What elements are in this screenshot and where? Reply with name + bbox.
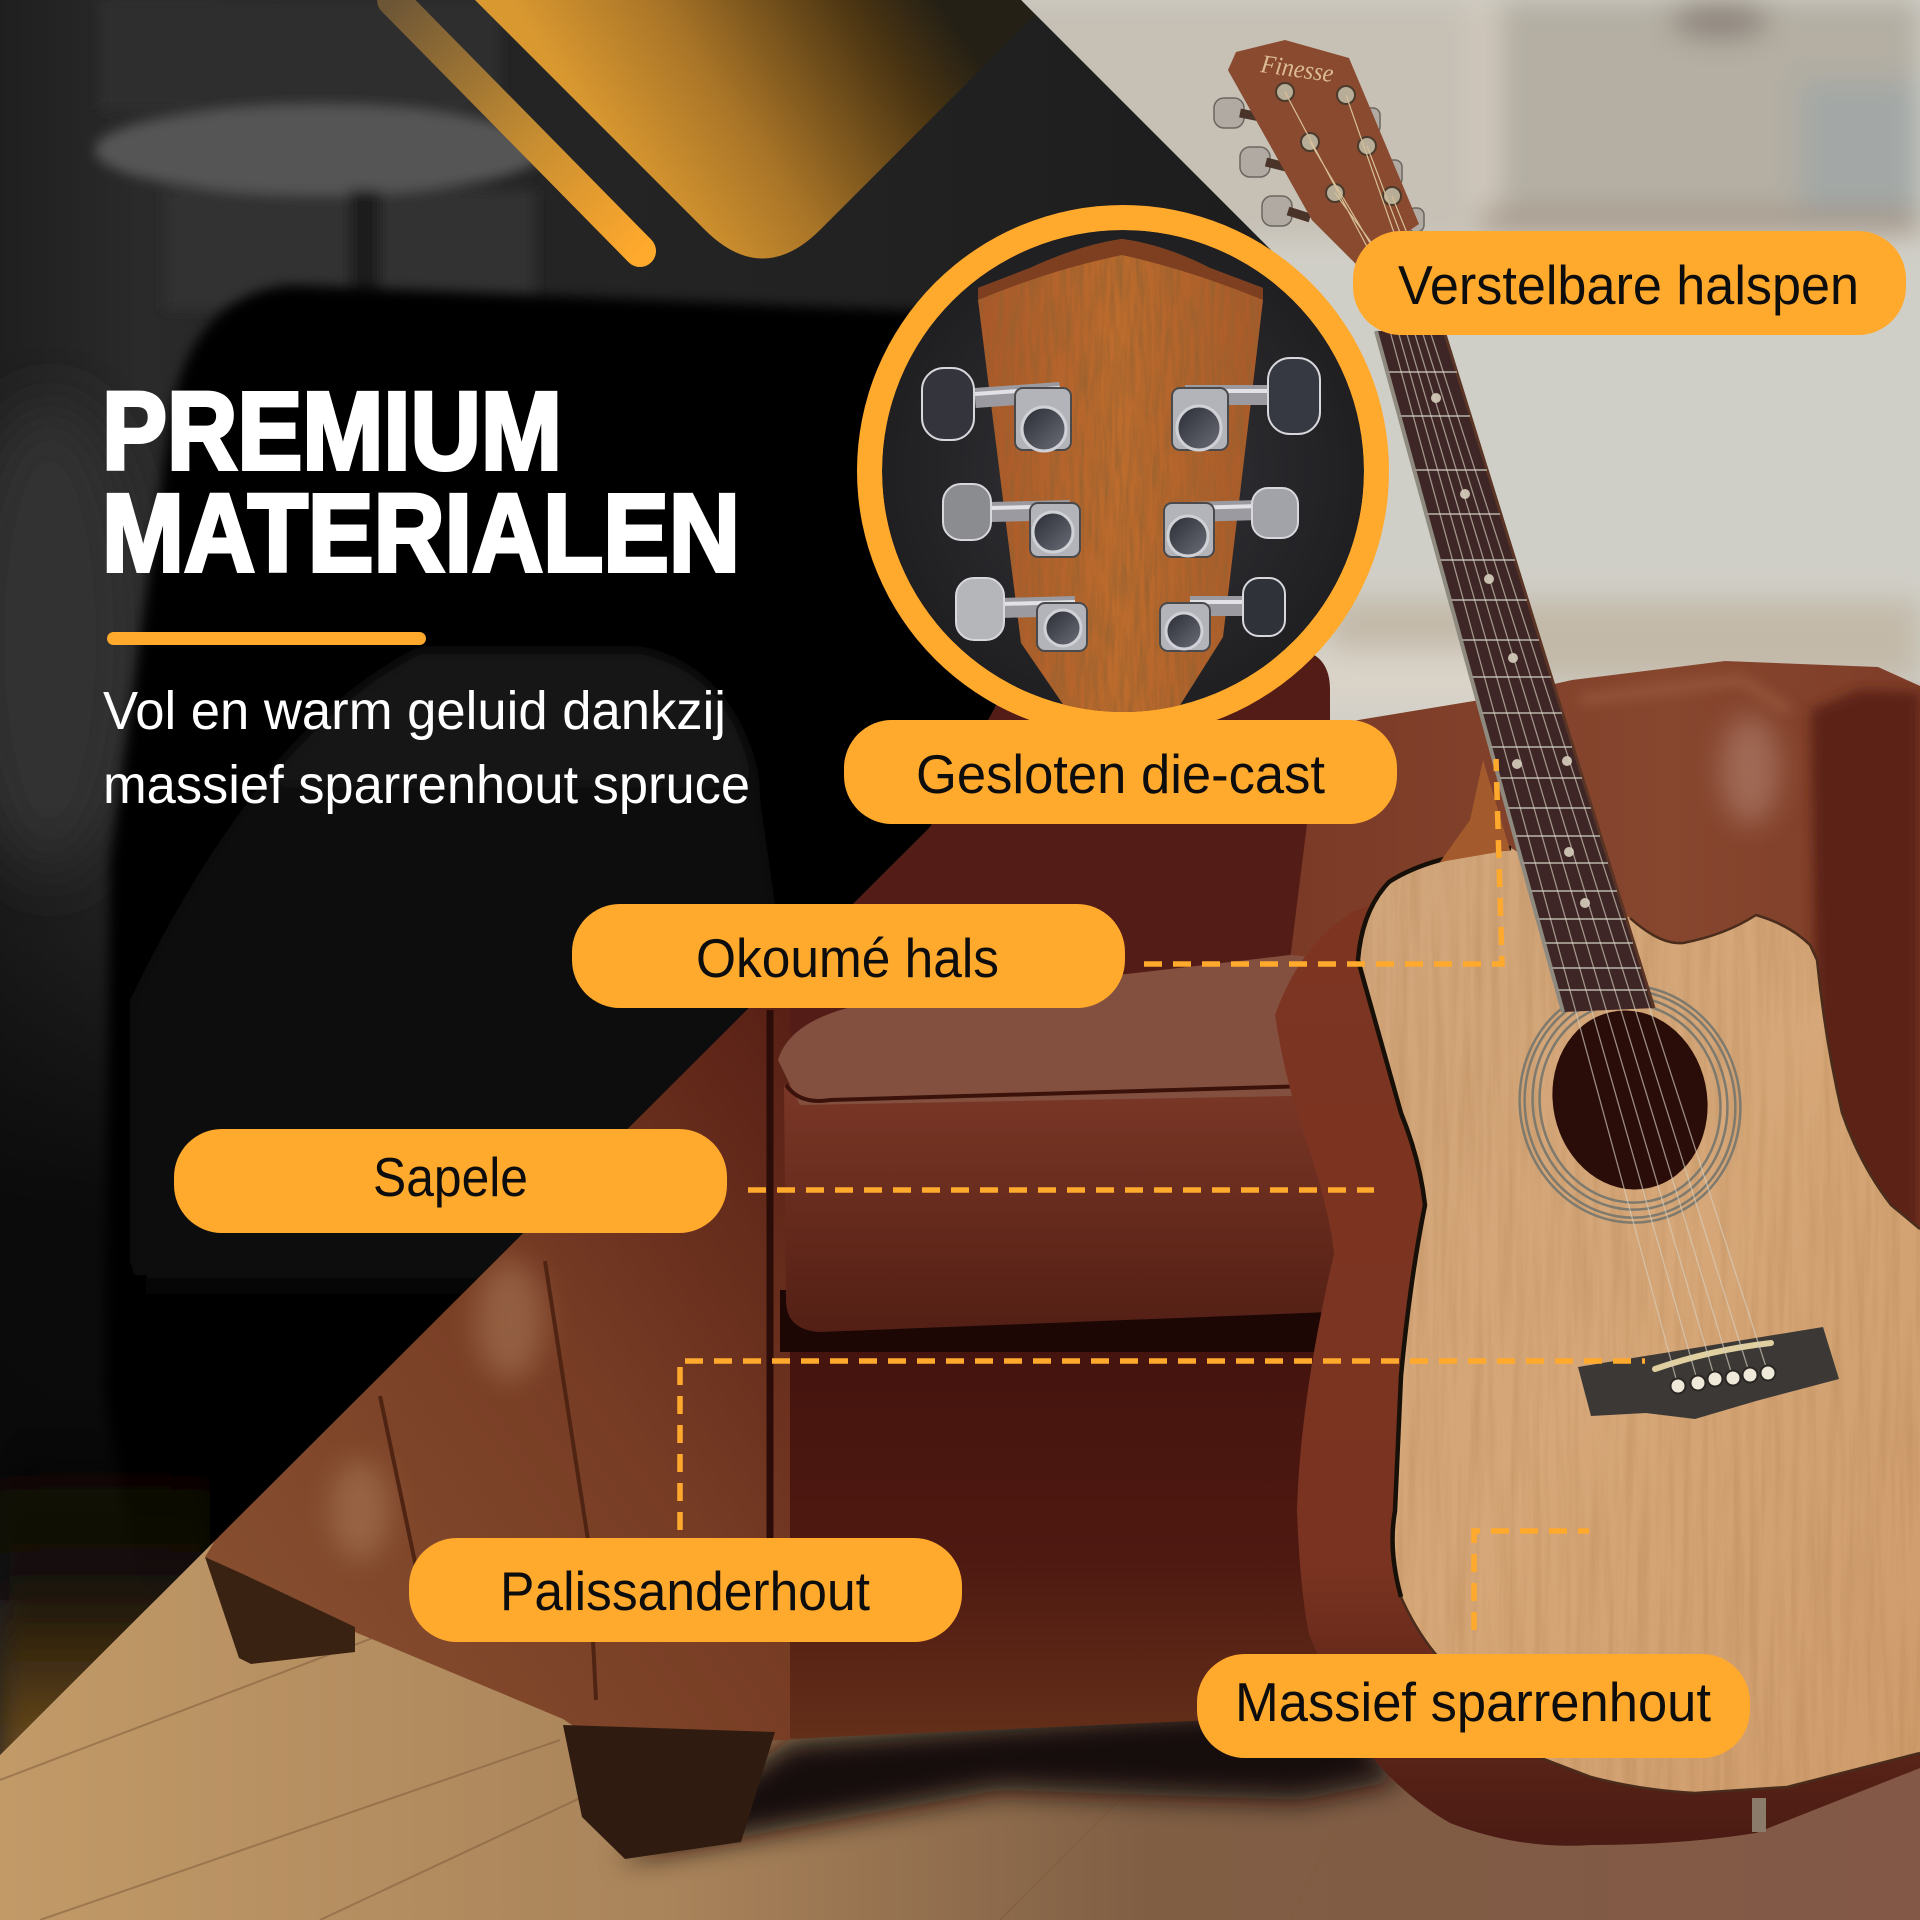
subtitle (103, 681, 750, 815)
lit wall patch left (0, 409, 114, 864)
label: Massief sparrenhout: Massief sparrenhout (1235, 1671, 1711, 1733)
frets (1387, 372, 1647, 990)
chair front lower panel (770, 1290, 1350, 1739)
top decoration: gold rounded diamond (475, 0, 1035, 258)
dark panel with grayscale armchair (0, 0, 1272, 1755)
fretboard (1376, 331, 1654, 1012)
orange ring (857, 205, 1389, 737)
seat cushion top (778, 955, 1345, 1105)
chair back behind cushion (760, 650, 1330, 1050)
label: Okoumé hals (572, 904, 1125, 1008)
front seam (766, 1010, 774, 1540)
tuner shafts (1240, 113, 1310, 218)
right arm of the chair (1290, 661, 1920, 1300)
headstock rear wood (978, 239, 1263, 730)
dashed connector lines (680, 759, 1645, 1630)
divider rule (107, 632, 426, 645)
guitar top outline (1358, 848, 1511, 1597)
tuner posts (1276, 83, 1401, 205)
label: Palissanderhout: Palissanderhout (500, 1560, 870, 1622)
subtitle line 2: massief sparrenhout spruce (103, 755, 750, 815)
tuner: housings (1015, 388, 1228, 651)
black armchair (106, 280, 996, 1612)
lower arm of the black chair (130, 650, 790, 1500)
heading: PREMIUM MATERIALEN (102, 370, 740, 595)
dark gap under cushion (780, 1290, 1350, 1352)
headstock top edge (978, 239, 1263, 300)
cushion piping (786, 1085, 1345, 1101)
label: Palissanderhout (409, 1538, 962, 1642)
inset circle: headstock back detail (857, 205, 1389, 737)
label: Sapele: Sapele (373, 1146, 528, 1208)
guitar body side (1275, 860, 1920, 1846)
headstock side (1228, 66, 1362, 266)
connector: Massief sparrenhout (1474, 1531, 1589, 1630)
connector: Okoumé hals (1144, 759, 1502, 964)
rosette (1498, 965, 1762, 1243)
guitar top (1340, 840, 1920, 1800)
floor (0, 1480, 1920, 1920)
headstock logo: Finesse (1258, 49, 1335, 88)
tuner: gear covers (1022, 406, 1221, 649)
cutaway edge (1401, 915, 1920, 1793)
chair left side panel (205, 900, 790, 1744)
headstock tuner knobs (1214, 98, 1424, 232)
label: Verstelbare halspen (1353, 231, 1906, 335)
strings (1390, 331, 1768, 1386)
shadow under chair (620, 1700, 1400, 1860)
tuner: knobs (922, 358, 1320, 640)
connector: Palissanderhout (680, 1361, 1645, 1530)
label: Sapele (174, 1129, 727, 1233)
top decoration: diagonal bar (393, 0, 640, 251)
side panel seams (380, 1261, 596, 1700)
inset photo (882, 230, 1364, 735)
bridge pins (1670, 1366, 1776, 1394)
strap button (1752, 1798, 1766, 1832)
seat cushion front (784, 1085, 1345, 1332)
connector: Sapele (748, 1187, 1374, 1193)
label: Gesloten die-cast (844, 720, 1397, 824)
subtitle line 1: Vol en warm geluid dankzij (103, 681, 726, 741)
side panel scuffs (330, 1260, 545, 1560)
sound hole (1536, 996, 1724, 1204)
fret dots (1431, 393, 1590, 908)
label: Verstelbare halspen: Verstelbare halspen (1398, 254, 1859, 316)
headstock face (1228, 40, 1419, 266)
blurred lamp (95, 0, 545, 310)
saddle (1655, 1343, 1771, 1369)
wood grain (980, 255, 1258, 712)
arm end panel (1811, 690, 1920, 1290)
label: Okoumé hals: Okoumé hals (696, 927, 999, 989)
label: Massief sparrenhout (1197, 1654, 1750, 1758)
label: Gesloten die-cast: Gesloten die-cast (916, 743, 1325, 805)
floor plank lines (0, 1620, 1350, 1920)
chair legs (205, 1557, 355, 1664)
guitar (1214, 40, 1920, 1846)
heading line 1: PREMIUM (102, 370, 562, 493)
head strings (1285, 92, 1430, 290)
neck heel (1440, 760, 1510, 862)
blurred wall decor (1000, 0, 1920, 710)
arm highlight (1720, 715, 1780, 825)
heading line 2: MATERIALEN (102, 472, 740, 595)
dark left lower wall (0, 923, 220, 1600)
tuner: shafts (975, 392, 1275, 608)
floor gradient in the dark panel (0, 1471, 215, 1754)
bridge (1578, 1327, 1839, 1419)
